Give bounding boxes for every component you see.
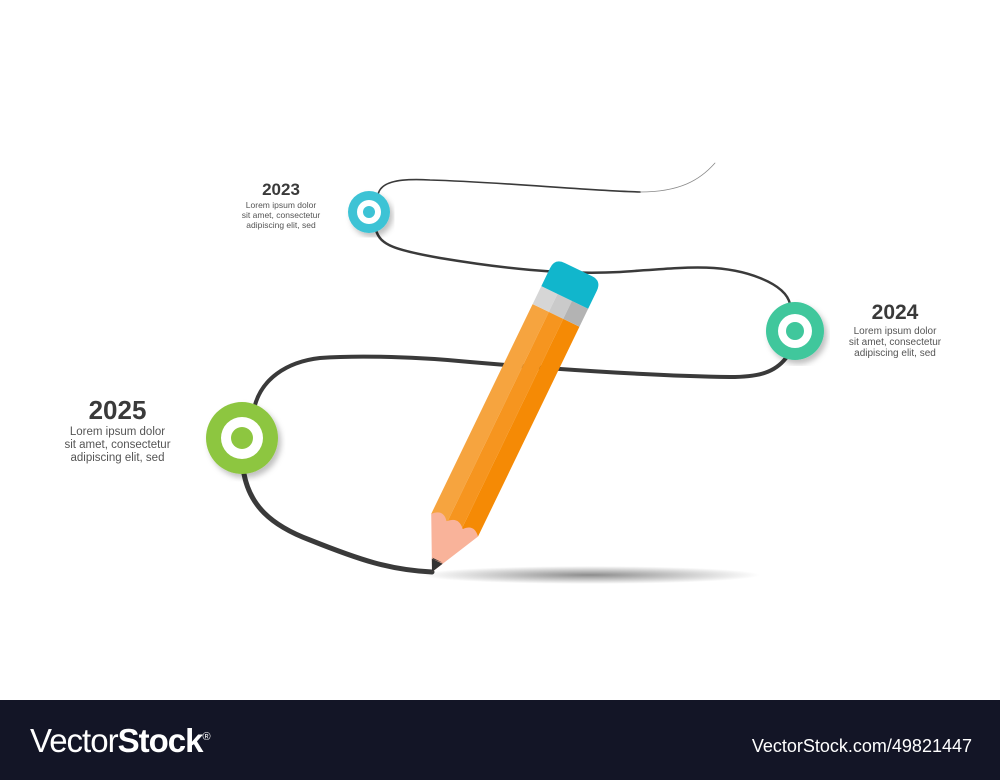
marker 2023 — [348, 191, 390, 233]
text: 2024: 2024 — [872, 301, 918, 324]
text: 2023: Lorem ipsum dolor — [246, 200, 316, 210]
text: 2025 — [64, 395, 171, 464]
footer bar — [0, 700, 1000, 780]
text: 2023: 2023 — [262, 180, 300, 199]
text: 2023: adipiscing elit, sed — [246, 220, 316, 230]
text: 2024: Lorem ipsum dolor — [854, 326, 936, 337]
text: 2025: 2025 — [89, 395, 146, 425]
text: 2023: sit amet, consectetur — [242, 210, 320, 220]
pencil — [409, 258, 602, 583]
text: 2024: sit amet, consectetur — [849, 337, 941, 348]
pencil shadow — [420, 566, 760, 584]
text: 2024 — [849, 301, 941, 359]
marker 2025 — [206, 402, 278, 474]
logo: VectorStock® — [30, 722, 210, 759]
text: 2024: adipiscing elit, sed — [854, 348, 936, 359]
text: 2025: sit amet, consectetur — [64, 439, 171, 451]
text: 2025: Lorem ipsum dolor — [70, 426, 165, 438]
text: 2023 — [242, 180, 320, 230]
marker 2024 — [766, 302, 824, 360]
url: VectorStock.com/49821447 — [752, 736, 972, 756]
text: 2025: adipiscing elit, sed — [70, 452, 164, 464]
drawn path line — [244, 163, 790, 572]
